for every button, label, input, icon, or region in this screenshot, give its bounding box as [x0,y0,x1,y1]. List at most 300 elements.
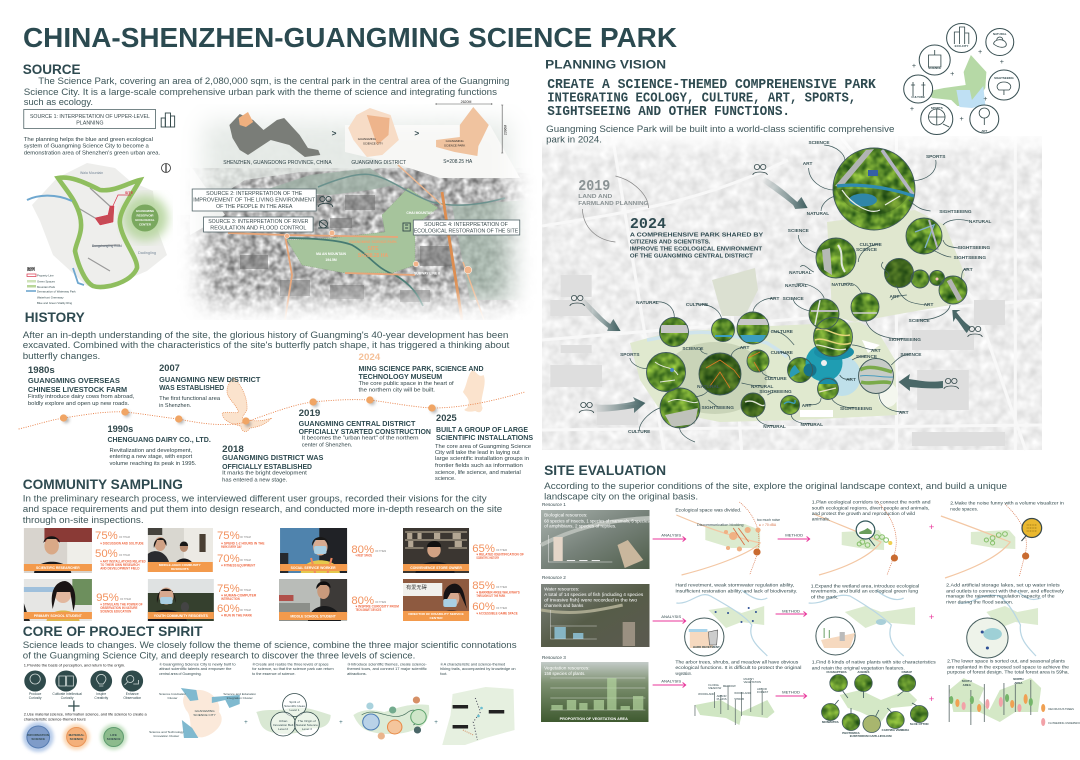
function labels: SIGHTSEEING [889,337,921,342]
map: ecological ring: Dadingling [138,251,156,255]
tours note [24,713,148,721]
map: seasonal forest: AREA [1014,681,1022,685]
locator shapes: S=208.25 HA [443,159,473,165]
function labels: SIGHTSEEING [954,255,986,260]
column notes: to the essence of science. [252,672,296,676]
function wheel: SIGHTSEEING [994,76,1015,80]
stats: primary school student: SCIENCE EDUCATION [100,610,132,613]
map: site location aerial: CHAI MOUNTAIN [406,211,434,215]
source intro text: Science City. It is a large-scale comprehensive urban park with the theme of science and integrating functions [24,87,497,98]
heading: planning vision: PLANNING VISION [545,58,666,71]
photo: middle school student [279,579,348,621]
icon row: perception: Curiosity [29,696,42,700]
stats: disability service director: OF THEM [496,607,507,610]
resource 2: water [541,575,650,647]
stats: disability service director: 60% [472,601,495,613]
map: plan ecological corridors: south ecological regions, divert people and animals, [812,506,930,511]
photo: scientific researcher [24,528,92,573]
milestone: 2007: WAS ESTABLISHED [159,383,225,392]
panel: core of project spirit [23,624,517,752]
stats: convenience store owner: SCIENTIFIC HISTORY [476,556,500,560]
stats: disability service director: ♥ ACCESSIBLE GAME SPACE [476,612,518,615]
diagram: three levels: Innovation Belt [273,723,294,727]
arrows: analysis and method: + [929,612,934,622]
lower circle details [655,319,800,427]
legend: ecological ring map: Blue and Green Vitality Ring [37,301,73,305]
photo: disability service director: CENTER [429,616,443,620]
source intro text: The Science Park, covering an area of 2,080,000 sqm, is the central park in the central area of the Guangming [38,76,509,87]
function labels: ART [899,410,909,415]
science badges: SCIENCE [107,737,121,741]
science badges: SCIENCE [31,737,45,741]
legend: ecological ring map: Property Line [37,274,54,278]
callout: source 1: SOURCE 1: INTERPRETATION OF UPPER-LEVEL [30,114,150,120]
icon row: perception: Creativity [94,696,109,700]
milestone: 2025: large scientific installation groups in [435,456,529,462]
function labels: CULTURE [764,376,787,381]
source intro text [24,76,509,108]
vegetation maps row [675,659,1080,738]
callout: source 3: REGULATION AND FLOOD CONTROL [210,226,306,231]
function wheel: ART [981,129,988,133]
milestone: 2025: 2025 [436,413,457,423]
map: ecological ring: ECOLOGICAL [135,218,155,222]
milestone: 2018 [222,444,323,483]
tours note: characteristic science-themed tours [24,718,86,721]
history intro text [23,330,510,362]
map: vegetation functions: WOODLAND [734,691,751,695]
community intro text [23,494,502,526]
function labels [620,140,992,434]
function labels: SCIENCE [808,140,829,145]
resource 2: water: Resource 2 [542,575,566,581]
function wheel: SCIENCE [928,66,941,70]
vision statement: CREATE A SCIENCE-THEMED COMPREHENSIVE PARK [547,78,877,93]
panel: history [19,310,533,483]
map: native plants: OSMAP [902,670,912,674]
map: native plants: CARYMIA VIMMERA [882,728,909,732]
milestone: 2019 [299,408,431,448]
milestone: 1980s: Firstly introduce dairy cows from abroad, [28,394,134,400]
timeline nodes [60,396,437,427]
milestone: 2024: MING SCIENCE PARK, SCIENCE AND [359,364,484,373]
function wheel: CULTURE [911,95,925,99]
locator shapes: > [332,129,337,138]
locator shapes: GUANGMING [446,139,464,143]
stats: scientific researcher: OF THEM [119,536,130,539]
icon: river regulation [318,220,329,228]
milestone: 2019: 2019 [299,408,320,418]
map: native plants: MOSMATRA [822,720,839,724]
map: native plants: ACERES [857,670,870,674]
planning text: demonstration area of Shenzhen's green urban area. [24,151,160,156]
callout: source 3 [204,217,313,232]
diagram: science clusters: Science and Technology [149,730,184,734]
diagram: science clusters: Integration Cluster [227,696,253,700]
function labels: ART [802,403,812,408]
aerial base [542,136,1042,450]
stats: youth residents: INTERACTION [221,597,240,601]
heading: core of project spirit: CORE OF PROJECT SPIRIT [23,624,203,640]
vision text [546,124,894,145]
locator shapes: 2620M [461,100,471,104]
map: vegetation functions: The arbor trees, shrubs, and meadow all have obvious [675,660,799,665]
milestone: 1980s: GUANGMING OVERSEAS [28,376,120,385]
milestone: 2019: center of Shenzhen. [302,443,352,448]
map: vegetation functions: ecological functions. It is difficult to protect the original [675,665,801,671]
map: vegetation functions [675,660,801,725]
map: vegetation functions: vegetation. [675,671,692,677]
photo: social service worker: SOCIAL SERVICE WORKER [291,566,336,570]
function wheel: + [910,105,914,113]
diagram: science clusters: Science and Education [223,692,256,696]
map: plan ecological corridors: animals. [812,517,830,522]
diagram: hiking trails [442,687,515,745]
stats: disability service director: OF THEM [496,586,507,589]
milestone: 1980s: boldly explore and open up new roads. [28,401,129,407]
map: storage lakes: river during the flood season. [946,600,1013,605]
stats: social service worker [351,544,386,557]
map: ecological ring: SITE [125,191,134,195]
locator shapes [223,100,507,166]
map: native plants: OUANAPTERA [826,670,847,674]
title: CHINA-SHENZHEN-GUANGMING SCIENCE PARK [23,22,677,53]
milestone: 2007 [159,363,261,409]
heading: history: HISTORY [25,310,85,326]
map: native plants: EUPATORIUM CAPILLIFOLIUM [850,734,892,738]
map: ecological ring: CENTER [139,222,152,226]
timeline path [19,392,525,429]
function labels: SPORTS [926,154,945,159]
history intro text: After an in-depth understanding of the site, the glorious history of Guangming's 40-year development has been [23,330,508,341]
diagram: three levels [256,694,331,736]
map: ecological space divided [675,502,780,575]
map: vegetation functions: MEADOW [723,684,736,688]
function labels: SPORTS [620,352,640,357]
milestone: 2025: The core area of Guangming Science [435,444,531,450]
stats: social service worker: ♥ REST SPACE [355,554,373,557]
icon row: perception: Inspire [96,692,106,696]
diagram: science clusters: Innovation Cluster [153,734,179,738]
legend: ecological ring map: Waterfront Greenway [37,296,64,300]
photo: convenience store owner: CONVENIENCE STORE OWNER [410,566,462,570]
stats: middle-aged residents [217,530,265,567]
stats: convenience store owner [472,543,524,560]
stats: middle-aged residents: 75% [217,530,240,542]
stats: scientific researcher: ♥ DISCUSSION AND SOLITUDE [100,542,144,545]
function labels: CULTURE [771,350,793,355]
icon: people [318,196,333,207]
function labels: ART [803,161,813,166]
icon row: perception: Observation [123,696,141,700]
function wheel: + [1000,58,1004,66]
photo: disability service director: DIRECTOR OF DISABILITY SERVICE [408,612,464,616]
stats: scientific researcher [95,530,146,570]
diagram: science clusters [149,688,256,738]
planning text: system of Guangming Science City to become a [24,144,149,149]
milestone: 2019: OFFICIALLY STARTED CONSTRUCTION [299,427,431,436]
map: site location aerial: SITE [367,246,379,252]
diagram: science clusters: Cluster [168,696,178,700]
arcs around years [582,176,648,242]
plus sign: + [244,719,248,726]
resource 1: biological: Resource 1 [542,502,566,508]
map: ecological ring: Wala Mountain [80,171,103,175]
function wheel: ECO-CITY [955,44,969,48]
milestone: 2018: GUANGMING DISTRICT WAS [222,453,323,462]
stats: scientific researcher: AND DEVELOPMENT FIELD [100,567,140,570]
stats: convenience store owner: ♥ RELATED IDENTIFICATION OF [476,553,524,556]
resource 2: water: A total of 14 species of fish (including 4 species [544,592,644,598]
heading: site evaluation: SITE EVALUATION [544,463,666,479]
resource 3: vegetation: 158 species of plants. [544,671,585,677]
label: 2024 vision: 2024 [630,215,666,233]
milestone: 1980s: CHINESE LIVESTOCK FARM [28,385,127,394]
photo: middle-aged residents [148,528,213,572]
photo: scientific researcher: SCIENTIFIC RESEARCHER [36,566,80,570]
stats: primary school student: OBSERVATION IN NATURE [100,606,138,610]
icon row: perception: Cultivate Intellectual [52,692,82,696]
science badges: MATERIAL [69,733,84,737]
arrow: visitors southwest [594,397,645,413]
stats: middle school student: TECH-SMART DEVICES [355,608,382,612]
arrows: analysis and method: + [929,694,934,704]
stats: middle-aged residents: OF THEM [240,536,251,539]
milestone: 1980s: 1980s [28,365,55,375]
arrows: analysis and method: + [929,522,934,532]
science badges [23,722,127,752]
icon row: perception: Produce [29,692,41,696]
column notes: foot. [440,672,447,676]
locator shapes: GUANGMING DISTRICT [351,160,407,166]
map: storage lakes [946,583,1064,658]
diagram: three levels: Natural Science [296,723,318,727]
label: 2024 vision: OF THE GUANGMING CENTRAL DISTRICT [630,254,754,259]
milestone: 1990s: volume reaching its peak in 1995. [110,461,196,467]
locator shapes: 2396M [503,125,507,135]
science badges: INFORMATION [27,733,49,737]
column notes: ④A characteristic and science-themed [440,663,505,666]
panel: site evaluation [541,463,1080,738]
map: seasonal forest: purpose of forest design. The total forest area is 59ha. [947,670,1069,675]
arrows: analysis and method: METHOD [782,690,800,694]
arrows: analysis and method: ANALYSIS [661,614,681,619]
map: wetland expansion: 1.Expand the wetland area, introduce ecological [811,584,919,589]
arrow: visitors east [899,374,943,391]
function labels: SCIENCE [788,228,809,233]
photo: primary school student [24,579,92,621]
function labels: NATURAL [800,422,823,427]
diagram: science clusters: SCIENCE CITY [193,713,217,717]
function labels: NATURAL [969,219,992,224]
vision statement: INTEGRATING ECOLOGY, CULTURE, ART, SPORTS, [547,92,856,106]
stats: youth residents: ♥ HUMAN-COMPUTER [221,594,257,597]
function labels: SCIENCE [682,346,703,351]
plus sign [68,700,80,712]
function labels: SCIENCE [900,352,921,357]
function labels: ART [770,296,780,301]
callout: source 1: PLANNING [76,121,104,126]
column notes: ③Introduce scientific themes, create science- [347,663,428,666]
butterfly motif: 2018 [222,378,272,432]
callout: source 1 [24,110,156,128]
label: 2019 planning: 2019 [578,177,610,195]
arrows: analysis and method: METHOD [782,609,800,613]
milestone: 2007: The first functional area [159,396,220,402]
icon row: perception [24,670,143,700]
icon: city buildings [161,113,175,127]
legend: ecological ring map: 图例 [27,266,35,272]
panel: community sampling [23,477,524,621]
column notes: hiking trails, accompanied by knowledge on [440,667,516,671]
function labels: SCIENCE [783,296,804,301]
locator shapes: SCIENCE CITY [363,142,383,145]
light lake [823,356,861,396]
map: seasonal forest: 2.The lower space is sorted out, and seasonal plants [947,659,1065,664]
arrows: analysis and method: ANALYSIS [661,679,681,683]
evaluation intro text: According to the superior conditions of the site, explore the original landscape context, and build a unique [544,481,1007,492]
diagram: science clusters: Science Incubation [159,692,186,696]
label: 2019 planning: LAND AND [578,194,613,200]
map: seasonal forest: SOUTH [962,679,972,683]
callout: source 2: IMPROVEMENT OF THE LIVING ENVIRONMENT [193,198,316,203]
diagram: science clusters: GUANGMING [195,709,215,713]
diagram: three levels: Level 2 [278,727,288,731]
column notes [159,663,516,676]
icon row: perception: Enhance [126,692,139,696]
function labels: ART [740,345,750,350]
planning text: The planning helps the blue and green ecological [24,137,153,143]
evaluation intro text [544,481,1007,502]
connector curves [630,145,969,442]
arrows: analysis and method: METHOD [785,533,803,537]
stats: youth residents: ♥ RUN IN THE PARK [221,614,253,617]
map: vegetation functions: PLAINS [717,697,727,701]
map: ecological space divided: Discommunication blocking [697,523,744,527]
milestone: 2025: SCIENTIFIC INSTALLATIONS [436,433,533,442]
butterfly motif: 2025 [463,370,485,412]
milestone: 1990s: entering a new stage, with export [110,454,193,460]
function wheel: + [983,95,987,103]
function labels: CULTURE [860,242,882,247]
function labels: NATURAL [763,424,786,429]
stats: primary school student: OF THEM [120,598,131,601]
stats: disability service director: ♥ BARRIER-FREE WALKWAYS [476,591,520,594]
perception note: 1.Provide the basis of perception, and return to the origin. [24,664,125,667]
milestone: 2019: GUANGMING CENTRAL DISTRICT [299,419,416,428]
milestone: 2025: BUILT A GROUP OF LARGE [436,425,528,434]
map: site location aerial [186,116,528,320]
callout: source 4: ECOLOGICAL RESTORATION OF THE SITE [414,229,519,234]
function labels: CULTURE [686,302,708,307]
milestone: 2018: It marks the bright development [222,471,307,476]
map: plan ecological corridors: and protect the growth and reproduction of wild [812,511,915,517]
locator shapes: SHENZHEN, GUANGDONG PROVINCE, CHINA [223,160,332,166]
detail circles [646,148,967,428]
map: seasonal forest: are replanted in the exposed soil space to achieve the [947,665,1069,670]
map: site location aerial: GUANGMING SCIENCE PARK [349,240,397,244]
stats: scientific researcher: ♥ ART INSTALLATIONS RELATED [100,560,146,563]
spirit intro text: Science leads to changes. We closely follow the theme of science, combine the three major scientific connotations [23,640,517,651]
diagram: three levels: Spirit of [289,700,300,704]
map: storage lakes: 2.Add artificial storage lakes, set up water inlets [946,583,1060,588]
map: plan ecological corridors: 1.Plan ecological corridors to connect the north and [812,500,931,505]
legend: ecological ring map: Mountain Park [37,285,56,289]
stats: convenience store owner: OF THEM [496,549,507,552]
source intro text: such as ecology. [24,97,93,108]
function labels: SIGHTSEEING [840,406,873,411]
label: 2024 vision: IMPROVE THE ECOLOGICAL ENVIRONMENT [630,247,763,252]
diagram: science tours [353,696,429,740]
stats: primary school student: ♥ STIMULATE THE POWER OF [100,603,143,606]
function labels: SCIENCE [856,354,877,359]
resource 2: water: of invasive fish) were recorded in the two [544,598,637,603]
lake [804,344,854,382]
map: seasonal forest: DECIDUOUS TREES [1048,707,1074,711]
map: vegetation functions: MEADOW [708,686,722,690]
map: wetland expansion: of the park. [811,595,839,600]
milestone: 2007: 2007 [159,363,180,373]
function labels: ART [871,348,881,353]
milestone: 1990s: CHENGUANG DAIRY CO., LTD. [107,435,211,444]
map: site location aerial: SUBWAY LINE 6 [414,272,440,276]
milestone: 2018: OFFICIALLY ESTABLISHED [222,462,313,471]
milestone: 2007: in Shenzhen. [159,403,191,409]
park green areas [630,210,965,422]
panel: planning vision [545,24,1019,145]
function labels: SCIENCE [856,247,877,252]
top lake circles [646,148,967,428]
stats: disability service director: THROUGHOUT THE PARK [476,594,506,598]
map: ecological ring: Dongchangling Road [92,244,122,248]
planning text [24,137,160,156]
stats: disability service director: 85% [472,580,495,592]
stats: youth residents: 60% [217,603,240,615]
function wheel: + [978,48,982,56]
milestone: 2025: City will take the lead in laying out [435,450,520,456]
timeline [19,352,533,483]
photo: middle school student: MIDDLE SCHOOL STUDENT [290,615,336,618]
photo: social service worker [280,528,348,573]
vision statement [547,78,877,120]
stats: scientific researcher: TO THEIR OWN RESEARCH [100,563,140,567]
stats: convenience store owner: 65% [472,543,495,555]
column notes: for science, so that the science park can return [252,667,334,671]
map: ecological ring [27,163,170,288]
map: ecological space divided: ● > 70 dBA [759,523,777,527]
photo: disability service director [403,579,470,621]
spirit intro text [23,640,517,661]
heading: source: SOURCE [23,62,81,78]
function labels: NATURAL [789,270,812,275]
column notes: central area of Guangming. [159,672,201,676]
tours note: 2.Use material science, information science, and life science to create a [24,713,148,716]
label: 2024 vision: A COMPREHENSIVE PARK SHARED BY [630,233,764,238]
resource 3: vegetation: PROPORTION OF VEGETATION AREA [560,717,628,721]
icon: restoration [403,223,410,231]
callout: source 2 [192,189,316,211]
vision text: park in 2024. [546,135,602,145]
stats: middle-aged residents: OF THEM [240,559,251,562]
community intro text: and space requirements and put them into design research, and conducted more in-depth research on the site [23,504,502,515]
community intro text: In the preliminary research process, we interviewed different user groups, recorded their visions for the city [23,494,487,504]
milestone: 1990s: 1990s [107,424,133,434]
function labels: SCIENCE [909,318,930,323]
callout: source 4: SOURCE 4: INTERPRETATION OF [424,222,508,228]
function labels: NATURAL [831,282,854,287]
milestone: 2025: science, life science, and material [435,470,521,476]
function labels: ART [963,267,973,272]
